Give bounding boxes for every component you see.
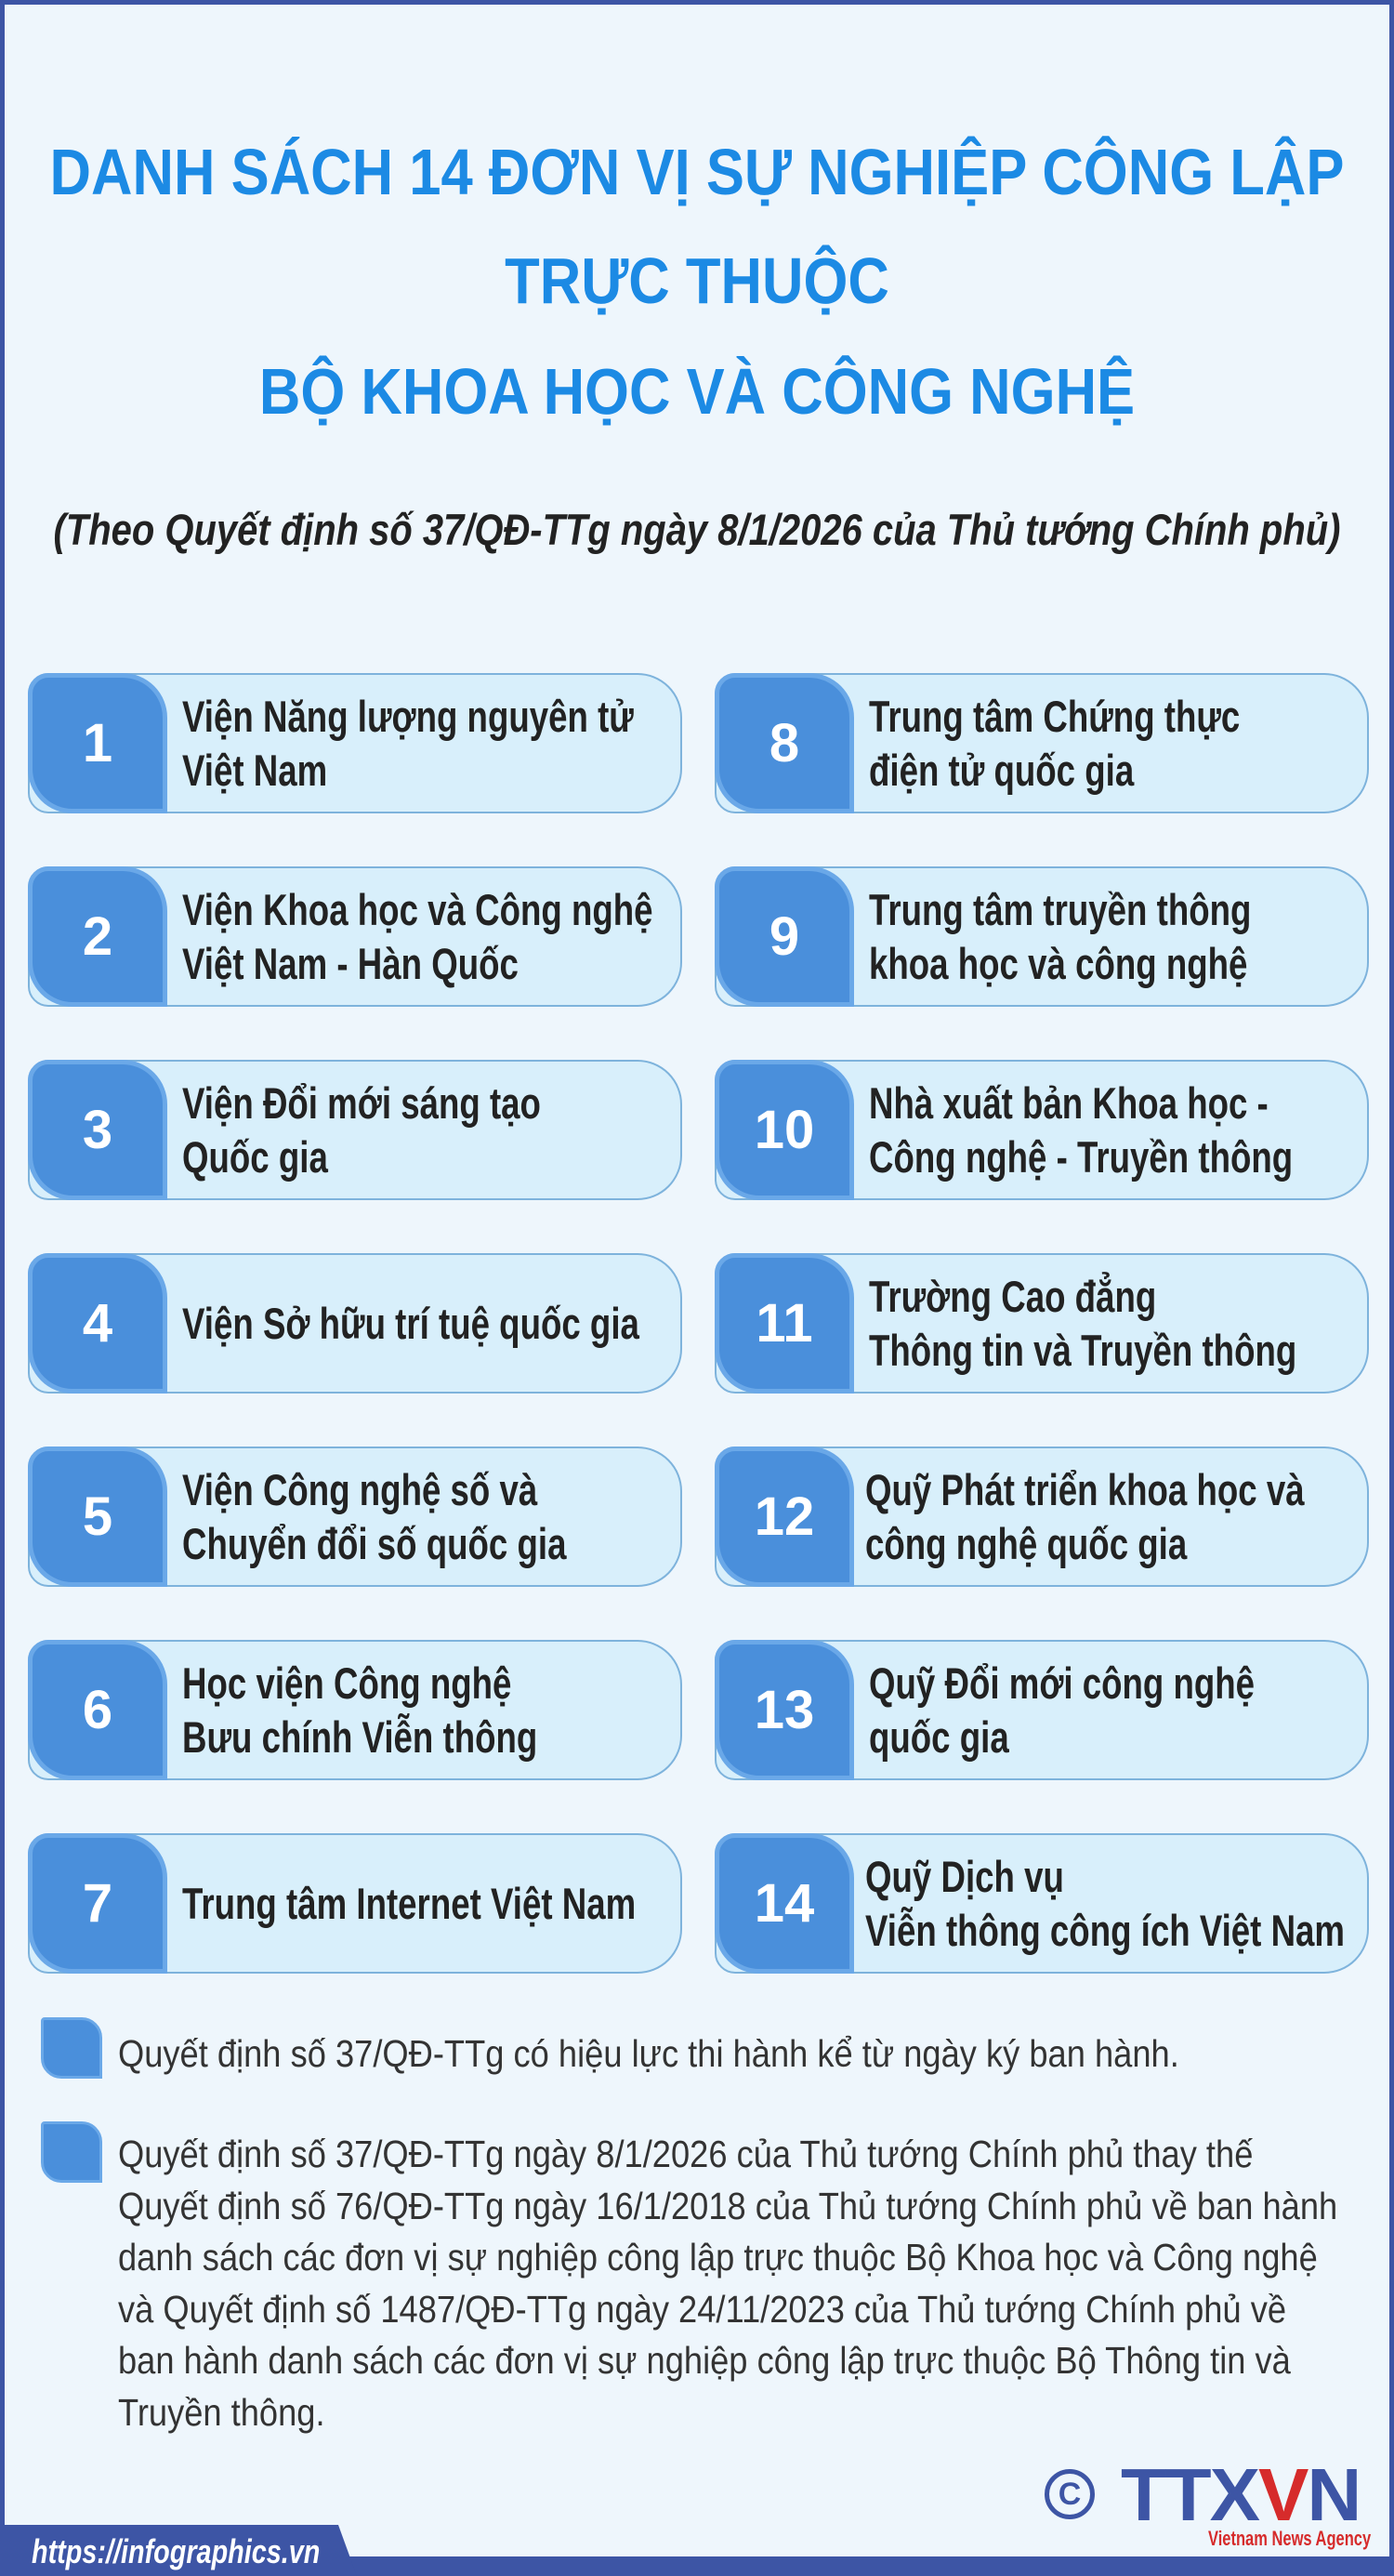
card 1: Viện Năng lượng nguyên tử xyxy=(182,692,634,740)
card 5: 5 xyxy=(83,1486,112,1547)
title: DANH SÁCH 14 ĐƠN VỊ SỰ NGHIỆP CÔNG LẬP xyxy=(50,136,1344,208)
card 1: 1 xyxy=(83,713,112,773)
note 2 text: Quyết định số 76/QĐ-TTg ngày 16/1/2018 của Thủ tướng Chính phủ về ban hành xyxy=(118,2185,1337,2227)
note 2 text xyxy=(118,2133,1337,2434)
card 6 xyxy=(28,1640,682,1780)
card 12: Quỹ Phát triển khoa học và xyxy=(865,1465,1305,1513)
card 13: 13 xyxy=(755,1680,814,1740)
card 12: 12 xyxy=(755,1486,814,1547)
card 3: 3 xyxy=(83,1100,112,1160)
card 7: Trung tâm Internet Việt Nam xyxy=(182,1878,636,1928)
note 2 text: và Quyết định số 1487/QĐ-TTg ngày 24/11/2023 của Thủ tướng Chính phủ về xyxy=(118,2287,1286,2330)
card 13: quốc gia xyxy=(869,1712,1009,1761)
card 3: Viện Đổi mới sáng tạo xyxy=(182,1078,541,1127)
logo: TTXVN xyxy=(1045,2453,1372,2550)
logo: TTXVN: C xyxy=(1059,2477,1081,2512)
card 2: Việt Nam - Hàn Quốc xyxy=(182,939,519,987)
card 8: điện tử quốc gia xyxy=(869,746,1134,794)
card 8 xyxy=(715,673,1369,813)
card 5: Chuyển đổi số quốc gia xyxy=(182,1519,566,1567)
card 9: 9 xyxy=(769,906,799,967)
footer url label: https://infographics.vn xyxy=(32,2532,320,2570)
note 2 text: ban hành danh sách các đơn vị sự nghiệp công lập trực thuộc Bộ Thông tin và xyxy=(118,2339,1291,2382)
card 14: 14 xyxy=(755,1873,814,1934)
card 6: 6 xyxy=(83,1680,112,1740)
logo: TTXVN: Vietnam News Agency xyxy=(1208,2527,1371,2550)
card 10: 10 xyxy=(755,1100,814,1160)
card 13 xyxy=(715,1640,1369,1780)
icon: note 1 xyxy=(41,2017,102,2079)
card 11 xyxy=(715,1253,1369,1394)
title xyxy=(50,136,1344,428)
card 11: 11 xyxy=(756,1293,813,1354)
card 1: Việt Nam xyxy=(182,746,327,794)
subtitle: (Theo Quyết định số 37/QĐ-TTg ngày 8/1/2026 của Thủ tướng Chính phủ) xyxy=(54,505,1340,554)
card 4: 4 xyxy=(83,1293,112,1354)
card 5 xyxy=(28,1447,682,1587)
card 2: Viện Khoa học và Công nghệ xyxy=(182,885,653,933)
card 7: 7 xyxy=(83,1873,112,1934)
title: BỘ KHOA HỌC VÀ CÔNG NGHỆ xyxy=(259,355,1135,428)
card 14: Quỹ Dịch vụ xyxy=(865,1852,1064,1900)
card 6: Học viện Công nghệ xyxy=(182,1658,511,1707)
card 14 xyxy=(715,1833,1369,1974)
card 13: Quỹ Đổi mới công nghệ xyxy=(869,1658,1255,1707)
card 11: Trường Cao đẳng xyxy=(869,1272,1156,1320)
card 5: Viện Công nghệ số và xyxy=(182,1465,537,1513)
card 12 xyxy=(715,1447,1369,1587)
logo: TTXVN: TTXVN xyxy=(1121,2453,1360,2536)
card 2: 2 xyxy=(83,906,112,967)
card 3 xyxy=(28,1060,682,1200)
icon: note 2 xyxy=(41,2121,102,2183)
card 10 xyxy=(715,1060,1369,1200)
footer bar xyxy=(0,2556,1394,2576)
card 9 xyxy=(715,866,1369,1007)
card 7 xyxy=(28,1833,682,1974)
card 14: Viễn thông công ích Việt Nam xyxy=(865,1906,1345,1954)
card 12: công nghệ quốc gia xyxy=(865,1519,1187,1567)
card 9: Trung tâm truyền thông xyxy=(869,885,1251,933)
card 2 xyxy=(28,866,682,1007)
title: TRỰC THUỘC xyxy=(505,244,889,317)
card 1 xyxy=(28,673,682,813)
card 8: 8 xyxy=(769,713,799,773)
note 2 text: Truyền thông. xyxy=(118,2391,325,2434)
card 8: Trung tâm Chứng thực xyxy=(869,692,1240,740)
note 2 text: danh sách các đơn vị sự nghiệp công lập trực thuộc Bộ Khoa học và Công nghệ xyxy=(118,2236,1318,2279)
card 9: khoa học và công nghệ xyxy=(869,939,1247,987)
card 4 xyxy=(28,1253,682,1394)
card 10: Nhà xuất bản Khoa học - xyxy=(869,1078,1269,1127)
footer url label xyxy=(5,2525,349,2569)
card 11: Thông tin và Truyền thông xyxy=(869,1326,1296,1374)
note 2 text: Quyết định số 37/QĐ-TTg ngày 8/1/2026 của Thủ tướng Chính phủ thay thế xyxy=(118,2133,1253,2175)
card 10: Công nghệ - Truyền thông xyxy=(869,1132,1293,1181)
card 4: Viện Sở hữu trí tuệ quốc gia xyxy=(182,1298,639,1348)
note 1 text: Quyết định số 37/QĐ-TTg có hiệu lực thi hành kể từ ngày ký ban hành. xyxy=(118,2032,1179,2075)
card 6: Bưu chính Viễn thông xyxy=(182,1712,537,1761)
card 3: Quốc gia xyxy=(182,1132,328,1181)
